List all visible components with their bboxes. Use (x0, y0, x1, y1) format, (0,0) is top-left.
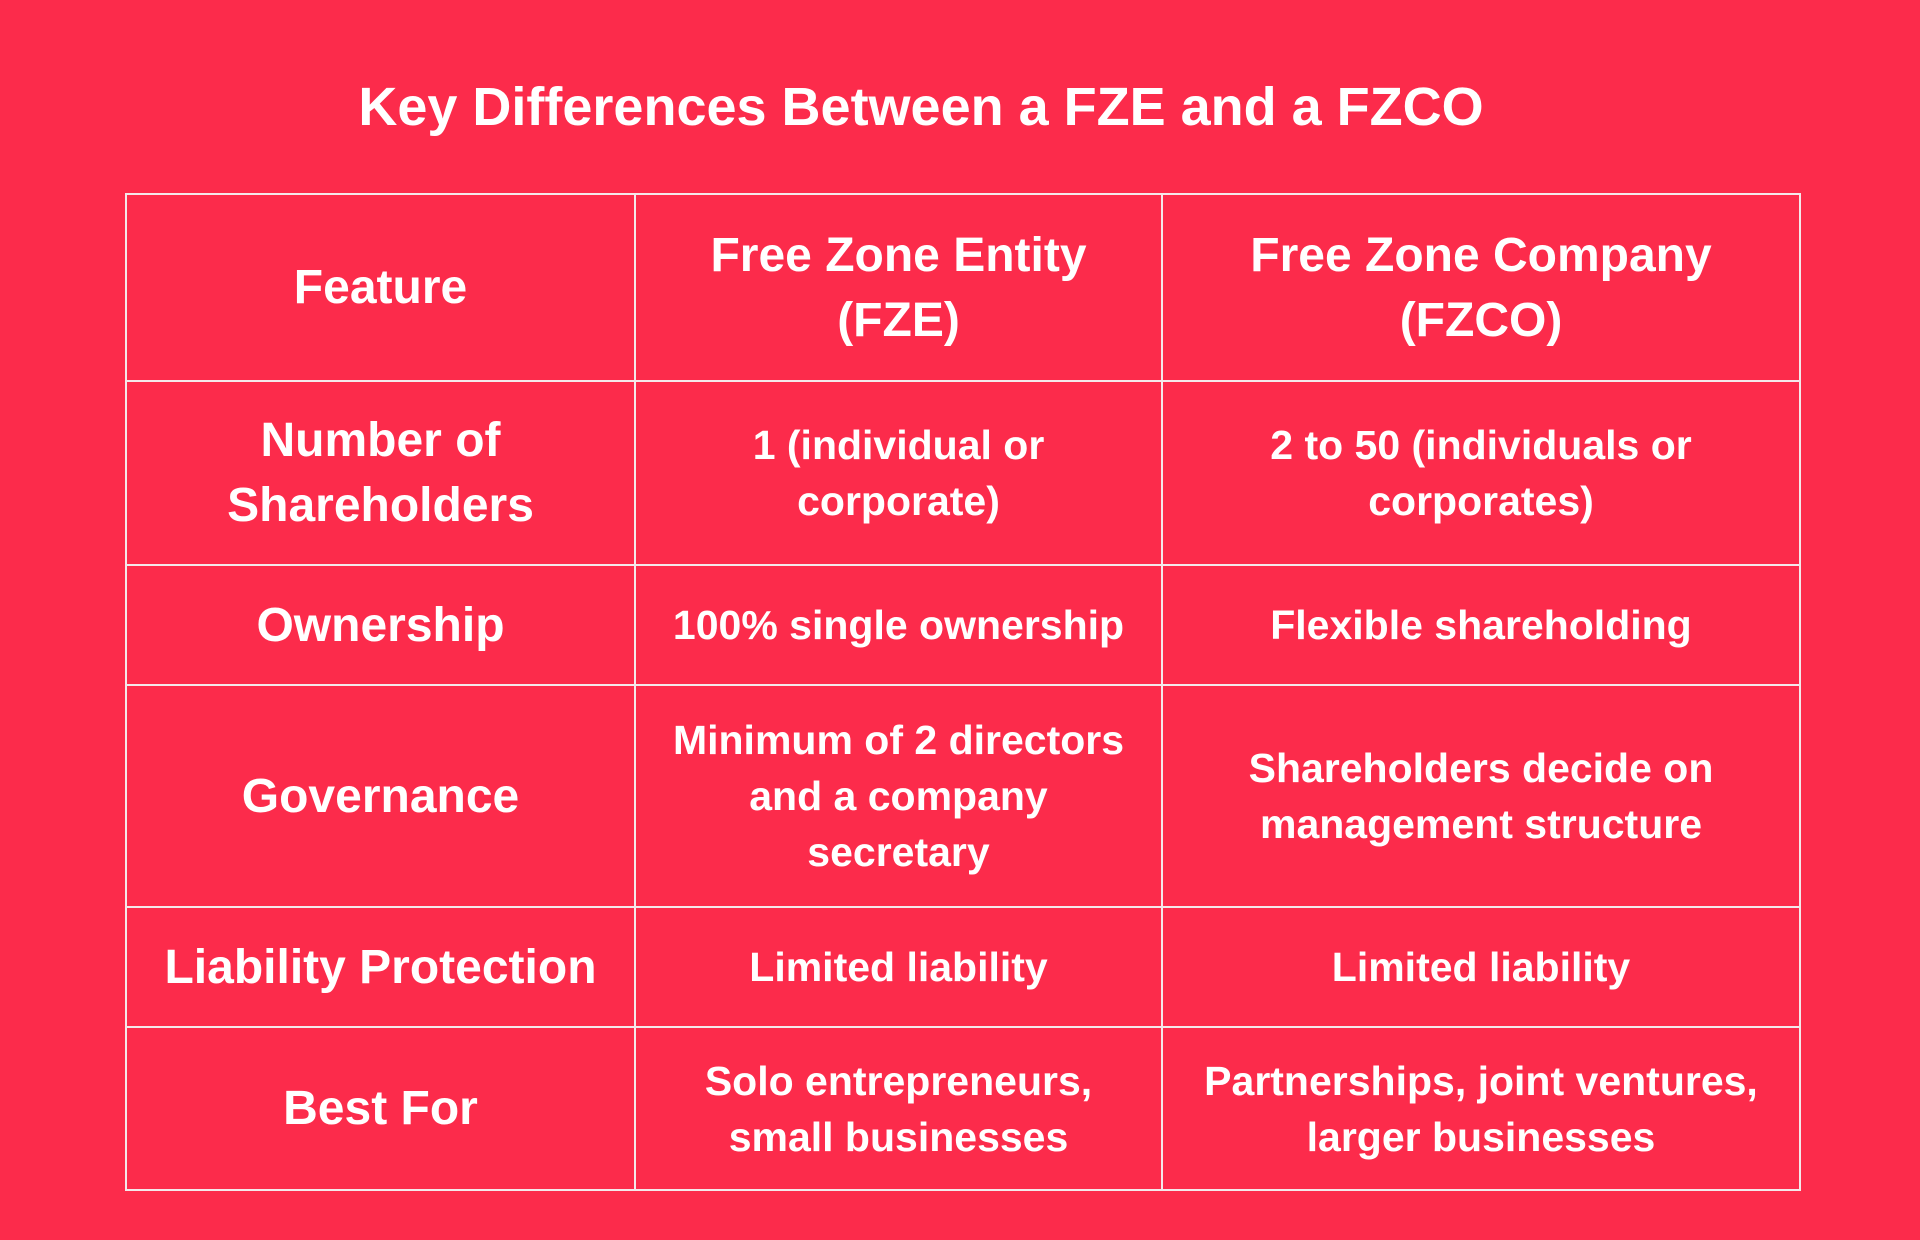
comparison table: Limited liability (1332, 944, 1630, 990)
comparison table: corporate) (797, 478, 1000, 524)
comparison table: Shareholders decide on (1249, 745, 1713, 791)
comparison table: Limited liability (749, 944, 1048, 990)
comparison table: 2 to 50 (individuals or (1270, 422, 1692, 468)
comparison table: Free Zone Entity (710, 228, 1087, 282)
comparison table: 1 (individual or (753, 422, 1044, 468)
comparison table: 100% single ownership (673, 602, 1124, 648)
comparison table: Feature (294, 261, 467, 314)
comparison table: Best For (283, 1082, 478, 1135)
comparison table: Number of (260, 414, 500, 467)
comparison table: and a company (749, 773, 1048, 819)
comparison table: small businesses (729, 1114, 1068, 1160)
comparison table: (FZCO) (1400, 294, 1562, 346)
title: Key Differences Between a FZE and a FZCO (358, 77, 1484, 137)
comparison table: Free Zone Company (1250, 228, 1712, 282)
comparison table: Minimum of 2 directors (673, 717, 1124, 763)
comparison table: Shareholders (227, 479, 534, 532)
comparison table: Flexible shareholding (1270, 602, 1692, 648)
comparison table: corporates) (1368, 478, 1594, 524)
comparison table: (FZE) (837, 294, 960, 346)
comparison table: Ownership (256, 598, 505, 652)
comparison table: Governance (242, 770, 519, 822)
comparison table: secretary (807, 829, 990, 875)
comparison table: Partnerships, joint ventures, (1204, 1058, 1758, 1104)
comparison table: larger businesses (1307, 1114, 1655, 1160)
comparison table: management structure (1260, 801, 1702, 847)
comparison table (125, 193, 1801, 1191)
comparison table: Solo entrepreneurs, (705, 1058, 1092, 1104)
comparison table: Liability Protection (164, 940, 597, 994)
